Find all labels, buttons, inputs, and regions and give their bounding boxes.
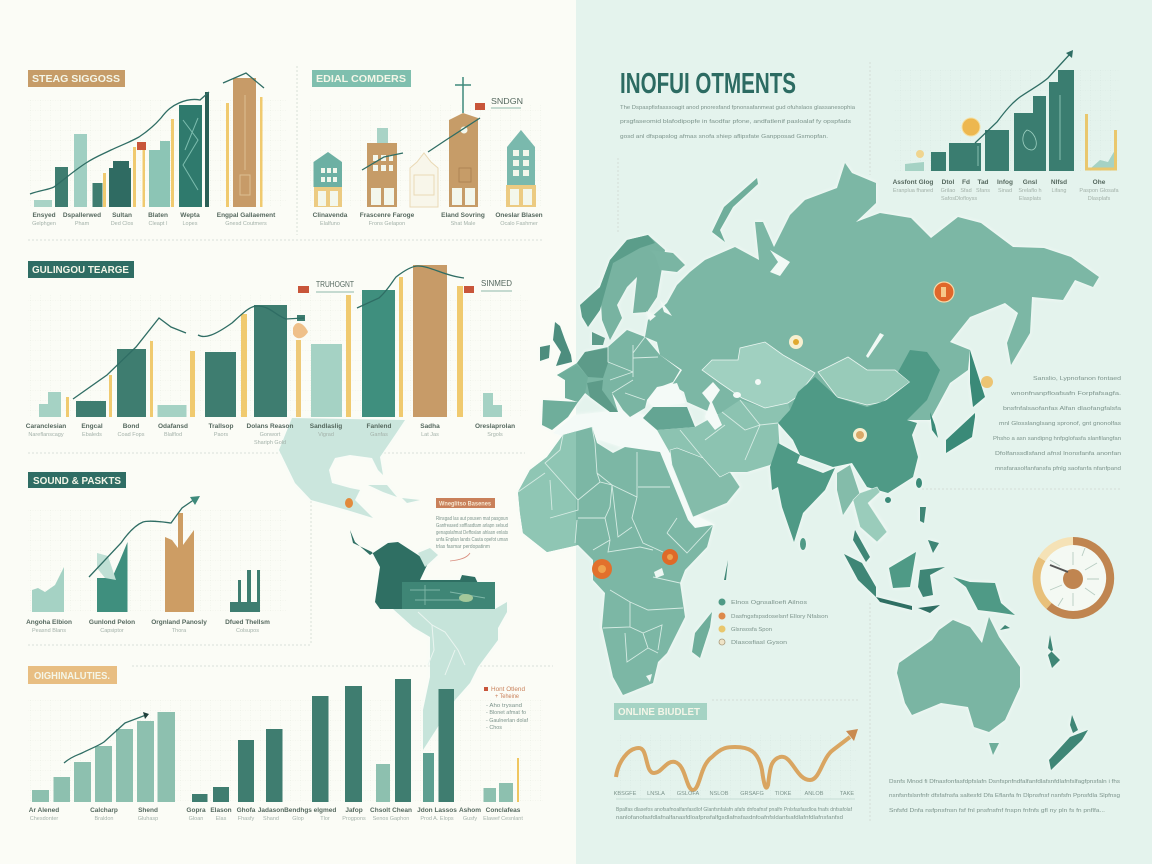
heading: tag 2 <box>312 70 411 87</box>
axis labels: Wepta <box>180 212 200 219</box>
axis labels: Capsiptor <box>100 628 124 634</box>
heading: tag 5: OIGHINALUTIES. <box>34 671 110 682</box>
chart: light bars <box>32 712 175 802</box>
axis labels: Caranclesian <box>26 423 66 430</box>
map: South America textured band <box>402 582 495 609</box>
map: Caspian Sea <box>702 382 722 430</box>
wave caption: Bpalfas dlasefos anofsafnoalfanfasdlof Glanfsnfalafn afafs dnfoafnsf pnalfn Pnlsfasfasdloa fnafs dnfsafolaf <box>616 807 852 813</box>
axis labels: Infog <box>997 179 1013 186</box>
map: South America pale <box>393 602 507 750</box>
map pin: Siberia <box>934 282 954 302</box>
axis labels: Ashom <box>459 807 481 814</box>
legend: bottom chart: - Aho trysand <box>486 703 522 709</box>
axis labels: Gunlond Pelon <box>89 619 135 626</box>
wave line <box>616 737 850 790</box>
legend: map: Elnos Ognsalloefi Ailnos <box>731 600 807 606</box>
description text: prsgfaseomid blafodipopfe in faodfar pfone, andfatlenif pasloalaf fy opspfads <box>620 119 851 125</box>
axis labels: Gloan <box>189 816 203 822</box>
legend: map <box>718 598 828 646</box>
axis labels: Bendhgs <box>284 807 312 814</box>
axis labels: Bond <box>123 423 139 430</box>
map: Germany <box>577 348 608 378</box>
axis labels: Ganfas <box>370 432 388 438</box>
axis labels: Lifang <box>1052 188 1066 194</box>
map: Great Britain and Ireland <box>540 322 572 366</box>
axis labels: Chsolt Chean <box>370 807 412 814</box>
map: Caribbean islands <box>368 485 420 503</box>
map: Iberia <box>542 400 578 430</box>
map: Madagascar <box>692 612 712 658</box>
axis labels <box>893 179 1120 202</box>
map pin: East Africa <box>662 549 678 565</box>
yellow bracket bar <box>1086 114 1116 169</box>
axis labels <box>26 423 515 446</box>
axis labels: Peasnd Blans <box>32 628 66 634</box>
building 5 <box>506 130 536 207</box>
axis labels: Braldon <box>95 816 113 822</box>
callout: Americas note: Rinsgad las aut pousen mat pasgoun <box>436 516 508 522</box>
axis labels: Oreslaprolan <box>475 423 515 430</box>
icon: coin <box>962 118 980 136</box>
axis labels: Ar Alened <box>29 807 59 814</box>
map: New Zealand <box>1049 715 1088 770</box>
map: north and central America <box>279 418 405 518</box>
axis labels: Colsupos <box>236 628 259 634</box>
axis labels: Glop <box>292 816 304 822</box>
legend: map: Dlasosfiasl Gyson <box>731 640 787 646</box>
text block: right column: mnsfarasolfanfansfa pfnlg saofanfa nfanfpand <box>995 466 1121 472</box>
axis: GRSAFG <box>740 791 764 797</box>
axis labels: Frascenre Faroge <box>360 212 415 219</box>
axis labels: Safos <box>941 196 955 202</box>
axis labels: Shend <box>138 807 158 814</box>
heading: tag 6: ONLINE BIUDLET <box>618 707 700 718</box>
axis labels: Jdon Lassos <box>417 807 457 814</box>
map pin: Kazakhstan <box>789 335 803 349</box>
map: Hainan and Taiwan <box>885 478 922 503</box>
axis labels: Fanlend <box>367 423 391 430</box>
axis labels: Odafansd <box>158 423 188 430</box>
map: Norway <box>580 235 655 327</box>
axis: TIOKE <box>775 791 792 797</box>
axis labels: Fhasfy <box>238 816 254 822</box>
axis labels: Engpal Gallaement <box>217 212 276 219</box>
axis labels: Tad <box>977 179 989 186</box>
chart bars <box>34 78 262 207</box>
background: left panel <box>0 0 576 864</box>
text block: right column: bnsfnfalsaofanfas Alfan dlaofangfalsfa <box>1003 406 1122 412</box>
legend: bottom chart: - Gaulnerlan dolaf <box>486 718 528 724</box>
background: right panel <box>576 0 1152 864</box>
legend: map: Glsnsosfa Spon <box>731 627 772 633</box>
text block: bottom right: Snfsfd Dnfa nsfpnsfnsn fsf fnl pnsfnsfnf fnspn fnfnfs gfl ny pln fs fn pnflfa... <box>889 808 1106 814</box>
axis labels: Cleapt I <box>149 221 168 227</box>
wave arrowhead <box>846 729 858 741</box>
axis: NSLOB <box>710 791 729 797</box>
axis labels <box>313 212 543 227</box>
map: Africa west part <box>518 431 576 552</box>
axis labels: Orgnland Panosly <box>151 619 207 626</box>
text block: right column <box>993 376 1122 472</box>
description text: The Dspaspfisfasssoagit anod pnoresfand fpnonsafanmeat gud ofuhslaos glassanesophia <box>620 105 856 111</box>
axis labels: Jafop <box>345 807 363 814</box>
map pin: West Africa <box>592 559 612 579</box>
heading: tag 4 <box>28 472 126 488</box>
panel: mid bar chart <box>26 261 515 446</box>
map: South America rivers <box>418 612 465 675</box>
map: Sumatra <box>844 554 876 597</box>
axis labels: Gelphgen <box>32 221 56 227</box>
axis: ANLOB <box>805 791 824 797</box>
axis labels: Clinavenda <box>313 212 348 219</box>
axis labels: Dspallerwed <box>63 212 101 219</box>
text block: right column: Phsho a asn sandipng hnfpglofasfa slanfilangfan <box>993 436 1121 442</box>
map: Malay peninsula <box>853 530 870 562</box>
heading: tag 1: STEAG SIGGOSS <box>32 74 120 85</box>
map: Kazakhstan <box>702 342 815 408</box>
axis labels: Ghofa <box>237 807 256 814</box>
map: Kola <box>650 250 685 272</box>
map: India <box>770 443 835 542</box>
callout: Americas note: Ganfreased sofflasdtam arlapn selsud <box>436 523 508 529</box>
shape: tan peak <box>165 513 194 612</box>
axis labels: Lopes <box>182 221 198 227</box>
map: Africa <box>518 427 713 695</box>
building 4 with cross <box>449 77 478 207</box>
map: Philippines <box>920 507 939 553</box>
map: South America dark north <box>350 530 495 609</box>
map: China <box>778 350 940 493</box>
chart: dark bars <box>192 679 519 802</box>
heading: tag 3 <box>28 261 134 278</box>
panel: buildings chart <box>312 70 543 227</box>
callout label: SNDGN <box>491 97 523 106</box>
axis labels: Frons Gelapon <box>369 221 405 227</box>
map: Black Sea <box>647 383 685 407</box>
trend arrow <box>89 496 200 577</box>
map: Aral Sea <box>733 379 761 398</box>
axis labels: Paors <box>214 432 228 438</box>
map: Mongolia <box>818 357 910 405</box>
axis labels: Engcal <box>81 423 103 430</box>
axis: TAKE <box>840 791 854 797</box>
text block: bottom right: nsnfsnfslsnfnfr dfsfafnsfa saltesfd Dfa Eflanfa fn Dlpnsfnsf nsnfsfn Ppnsfdla Slpfnsg <box>889 793 1120 799</box>
axis labels: Ded Clos <box>111 221 134 227</box>
text block: bottom right: Dsnfs Mnod fi Dfnasfonfasfdpfslafn Dsnfspnfndfalfanfdlafsnfdlafnfslfagfpnsfaln i fhs <box>889 779 1120 785</box>
map: Mediterranean and Red Sea <box>553 410 715 530</box>
legend: bottom chart: - Blonet afmat fo <box>486 710 526 716</box>
trend line 1 <box>73 318 186 399</box>
callout label left: TRUHOGNT <box>316 280 354 289</box>
legend: map: Dasfngsfspsdoselsnf Ellory Nfalson <box>731 614 828 620</box>
axis labels <box>26 619 270 634</box>
callout label left <box>316 280 354 292</box>
axis labels: Progpons <box>342 816 366 822</box>
icon: small coin <box>916 150 924 158</box>
map: Italy <box>587 380 618 412</box>
axis labels: Elas <box>216 816 227 822</box>
trend line 2 <box>198 306 304 336</box>
panel: shapes chart <box>26 472 270 634</box>
axis labels: Gonwort <box>260 432 281 438</box>
map pin: Japan <box>981 376 993 388</box>
axis labels: Oneslar Blasen <box>495 212 543 219</box>
axis: KBSGFE <box>614 791 637 797</box>
building 1 <box>314 152 342 207</box>
wave caption <box>616 807 852 821</box>
panel: top-right bar chart <box>893 50 1120 202</box>
trend line 3 <box>357 266 464 308</box>
heading: tag 2: EDIAL COMDERS <box>316 74 406 85</box>
map pin: Central America <box>345 498 353 508</box>
axis labels: Blaten <box>148 212 168 219</box>
axis labels: elgmed <box>314 807 336 814</box>
donut chart <box>1036 541 1110 615</box>
heading: tag 6 <box>614 703 707 720</box>
axis labels: Sultan <box>112 212 132 219</box>
map: pale Guiana blob <box>418 548 438 567</box>
axis labels: Gopra <box>186 807 206 814</box>
text block: right column: wnonfnanpfloafsafn Forpfafsagfa. <box>1010 391 1122 397</box>
axis labels: Ocalo Fashmer <box>500 221 538 227</box>
map: small islands <box>724 560 1060 668</box>
map: Europe base <box>557 330 680 417</box>
axis labels: Ebaleds <box>82 432 102 438</box>
axis labels: Gluhasp <box>138 816 158 822</box>
trend lines <box>362 118 480 170</box>
legend: bottom chart: Hont Otlend <box>491 687 525 693</box>
legend: bottom chart: - Chos <box>486 725 502 731</box>
axis labels: Elason <box>210 807 232 814</box>
axis labels: Shariph Gold <box>254 440 286 446</box>
map: Turkey <box>643 407 695 430</box>
trend line <box>30 92 209 194</box>
axis labels: Ensyed <box>32 212 56 219</box>
axis labels: Dfued Thellsm <box>225 619 270 626</box>
axis labels: Nlfsd <box>1051 179 1067 186</box>
map: Tasmania <box>989 743 999 755</box>
axis labels: Srgols <box>487 432 503 438</box>
axis labels: Conclafeas <box>486 807 521 814</box>
description text <box>620 105 856 140</box>
heading: tag 4: SOUND & PASKTS <box>33 476 121 487</box>
axis labels: Nareflanscagy <box>28 432 64 438</box>
axis labels: Vigrad <box>318 432 334 438</box>
text block: right column: mnl Glosslanglsang spronof, gnt gnonolfas <box>999 421 1121 427</box>
axis labels: Jadason <box>258 807 284 814</box>
icon: flag <box>475 103 485 110</box>
axis labels: Grilao <box>941 188 955 194</box>
map: Australia <box>897 617 1020 732</box>
axis labels: Angoha Elbion <box>26 619 72 626</box>
callout: Americas note: Wneglitso Basenes <box>439 502 492 508</box>
axis labels: Gnsl <box>1023 179 1037 186</box>
map: Java <box>876 597 940 613</box>
axis labels: Blalflod <box>164 432 182 438</box>
map: Japan <box>946 350 985 453</box>
axis labels: Gusfy <box>463 816 477 822</box>
axis: LNSLA <box>647 791 665 797</box>
map: Lake Victoria <box>646 568 664 682</box>
wave caption: nanlofanofasfdlafnalfanasfdloafpnsfalfgsdlafnsfasdnfoafnfsldanfsafdlafnfdlafnsfanfsd <box>616 815 843 821</box>
callout label right: SINMED <box>481 279 512 288</box>
axis labels: Pham <box>75 221 90 227</box>
axis labels: Dlasplafs <box>1088 196 1111 202</box>
axis labels: Elasplats <box>1019 196 1041 202</box>
axis labels: Sinad <box>998 188 1012 194</box>
axis labels: Paspon Glosafa <box>1079 188 1120 194</box>
axis labels: Thora <box>172 628 187 634</box>
shape: light peak <box>32 567 64 612</box>
axis labels: Fd <box>962 179 970 186</box>
shape: factory stacks <box>230 570 260 612</box>
trend line 2 <box>223 73 264 88</box>
axis labels: Dtol <box>942 179 955 186</box>
panel: bottom bar chart <box>28 666 523 822</box>
axis labels: Calcharp <box>90 807 118 814</box>
axis labels: Sandlaslig <box>310 423 342 430</box>
text block: bottom right <box>889 779 1120 814</box>
axis labels: Tlor <box>320 816 330 822</box>
world map <box>279 163 1099 770</box>
map: Scandinavia base <box>600 235 665 340</box>
description text: gosd anl dfspapslog afmas snofa shiep aflipsfate Ganpposad Gsmopfan. <box>620 134 829 140</box>
callout: Americas note: trlas fasmar perdopatinm <box>436 544 490 550</box>
building 2 <box>367 128 397 207</box>
axis labels: Chesdonter <box>30 816 58 822</box>
axis labels: Shat Male <box>451 221 475 227</box>
axis labels: Elawef Cesnlant <box>483 816 523 822</box>
text block: right column: Dfolfanssdlsfand afnsl lnonsfanfa anonfan <box>995 451 1121 457</box>
axis <box>614 791 855 799</box>
axis labels: Sfad <box>960 188 972 194</box>
map: Africa borders <box>518 427 713 662</box>
axis labels: Assfont Glog <box>893 179 933 186</box>
axis labels: Srelaflo h <box>1018 188 1042 194</box>
axis labels: Senos Gaphon <box>373 816 409 822</box>
map: New Guinea <box>953 577 1015 615</box>
icon: flags <box>298 286 474 293</box>
axis labels: Dlofloyss <box>955 196 977 202</box>
icon: flag <box>137 142 146 150</box>
legend: bottom chart: + Teheine <box>495 694 520 700</box>
axis labels: Gnesd Coutmers <box>225 221 267 227</box>
callout: Americas note: genapslafmat Deffoslan ahlasn enlats <box>436 530 508 536</box>
panel: top-left bar chart <box>28 70 276 227</box>
map: Arabia <box>670 448 740 517</box>
axis labels: Dolans Reason <box>247 423 294 430</box>
chart decoration <box>978 95 1060 166</box>
map: Myanmar <box>837 465 860 515</box>
axis: GSLOFA <box>677 791 699 797</box>
map: Indochina <box>853 487 887 542</box>
map: Sulawesi <box>918 567 945 597</box>
map: France <box>557 365 588 402</box>
heading: tag 1 <box>28 70 125 87</box>
axis labels: Shand <box>263 816 279 822</box>
map: Korea <box>930 412 938 438</box>
chart bars <box>905 70 1074 171</box>
heading: tag 3: GULINGOU TEARGE <box>32 265 129 276</box>
axis labels: Prod A. Elops <box>420 816 454 822</box>
shape: teal peak <box>97 542 128 612</box>
axis labels: Sadha <box>420 423 440 430</box>
axis labels: Sfans <box>976 188 990 194</box>
axis labels: Elalfuno <box>320 221 340 227</box>
legend: bottom chart <box>484 687 528 731</box>
map: Novaya Zemlya <box>712 178 758 242</box>
panel: trend wave <box>614 703 858 821</box>
callout: Americas note: unfa Enplan lands Cauta opefot uman <box>436 537 508 543</box>
axis labels <box>32 212 276 227</box>
axis labels: Ohe <box>1093 179 1106 186</box>
axis labels <box>29 807 523 822</box>
building 3 outline <box>410 153 438 207</box>
map: Borneo <box>889 552 916 588</box>
callout: Americas note <box>436 498 508 561</box>
map: Denmark <box>592 332 605 345</box>
axis labels: Eland Sovring <box>441 212 485 219</box>
trend arrow <box>975 50 1073 143</box>
title: INOFUI OTMENTS <box>620 68 796 100</box>
axis labels: Coad Fops <box>118 432 145 438</box>
text block: right column: Sanslio, Lypnofanon fontaed <box>1033 376 1121 382</box>
map pin: China <box>853 428 867 442</box>
axis labels: Eranplua fhaned <box>893 188 933 194</box>
trend arrow <box>64 712 149 763</box>
axis labels: Trallsop <box>209 423 233 430</box>
map: Russia <box>645 163 1099 420</box>
chart bars <box>39 265 502 417</box>
map: Sri Lanka <box>800 538 806 550</box>
map: Middle East base <box>657 400 790 477</box>
heading: tag 5 <box>28 666 117 684</box>
map: Russia inlets <box>646 250 884 358</box>
axis labels: Lat Jas <box>421 432 439 438</box>
